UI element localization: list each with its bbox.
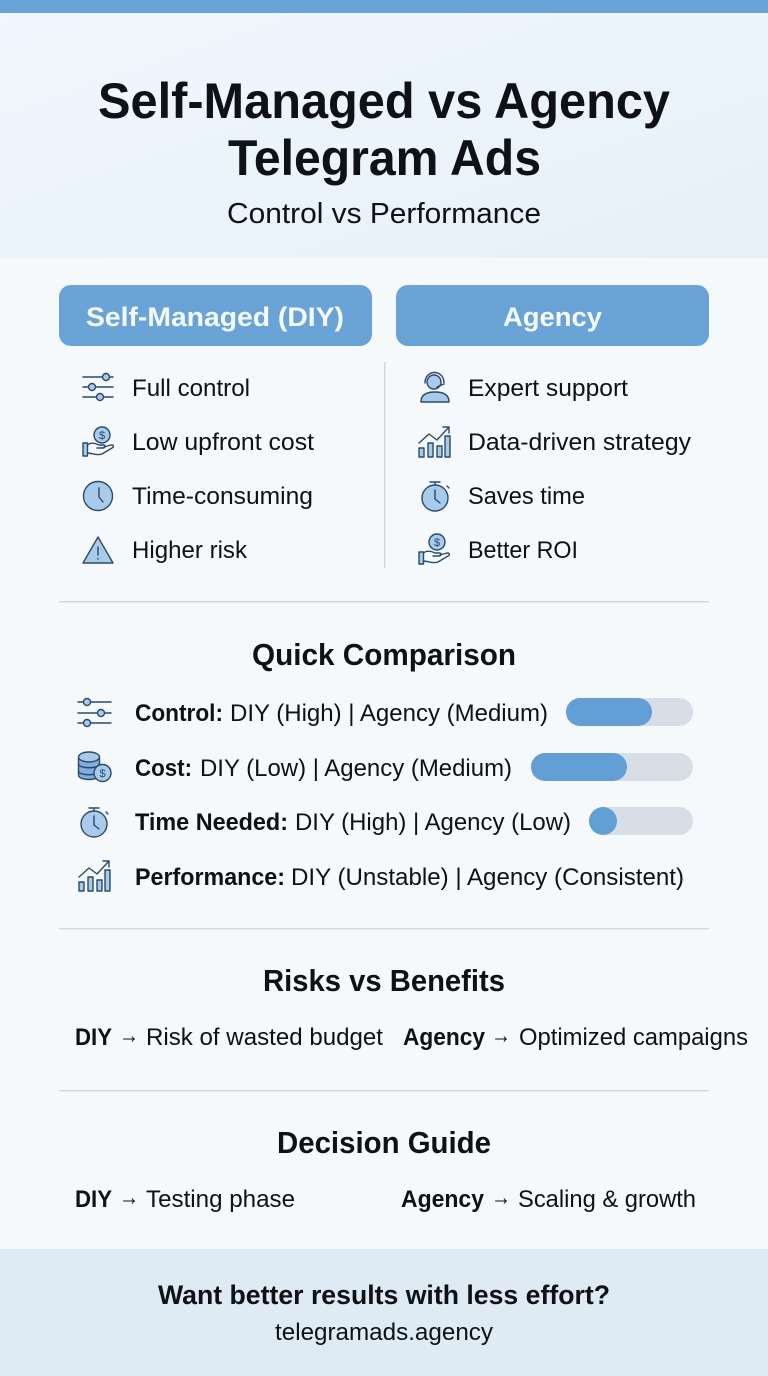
bar: time needed <box>589 807 693 835</box>
row: time needed <box>81 807 693 837</box>
column divider <box>384 362 386 568</box>
row: time needed: Time Needed: <box>135 809 288 836</box>
item: better ROI <box>419 534 578 564</box>
text: agency benefit: Optimized campaigns <box>519 1024 748 1051</box>
item: higher risk <box>83 537 248 564</box>
title: Telegram Ads <box>228 130 541 186</box>
text: DIY risk: DIY <box>75 1024 112 1051</box>
title: Self-Managed vs Agency <box>98 73 670 129</box>
bar: cost <box>531 753 693 781</box>
text: agency guide: Scaling & growth <box>518 1186 696 1213</box>
text: agency guide: → <box>491 1184 511 1211</box>
icon: coins <box>78 752 111 782</box>
text: agency guide: Agency <box>401 1186 485 1213</box>
text: DIY risk: → <box>119 1022 139 1049</box>
row: control <box>78 698 693 727</box>
item: higher risk: Higher risk <box>132 537 248 564</box>
item: better ROI: Better ROI <box>468 537 578 564</box>
heading: quick comparison: Quick Comparison <box>252 637 516 672</box>
row: control: DIY (High) | Agency (Medium) <box>230 700 548 727</box>
heading: agency: Agency <box>503 302 602 332</box>
row: control: Control: <box>135 700 223 727</box>
heading: agency <box>396 285 709 346</box>
row: performance <box>79 861 684 891</box>
item: saves time: Saves time <box>468 483 585 510</box>
text: agency benefit <box>403 1022 748 1051</box>
footer call to action: telegramads.agency <box>275 1319 493 1346</box>
panel: self-managed column <box>59 285 372 564</box>
heading: risks vs benefits: Risks vs Benefits <box>263 963 505 998</box>
item: low upfront cost: $ <box>99 430 105 442</box>
icon: coins: $ <box>99 768 106 780</box>
item: full control: Full control <box>132 375 250 402</box>
text: DIY risk: Risk of wasted budget <box>146 1024 383 1051</box>
row: cost <box>78 752 693 782</box>
item: better ROI: $ <box>434 537 440 549</box>
subtitle: Control vs Performance <box>227 198 541 230</box>
text: DIY guide: → <box>119 1184 139 1211</box>
item: time-consuming: Time-consuming <box>132 483 313 510</box>
footer call to action: Want better results with less effort? <box>158 1280 610 1310</box>
footer call to action <box>0 1249 768 1376</box>
icon: sliders <box>78 698 111 726</box>
item: saves time <box>422 482 585 511</box>
row: performance: Performance: <box>135 864 285 891</box>
text: DIY guide: Testing phase <box>146 1186 295 1213</box>
text: DIY guide <box>75 1184 295 1213</box>
panel: agency column <box>396 285 709 564</box>
item: full control <box>83 374 250 402</box>
row: performance: DIY (Unstable) | Agency (Consistent) <box>291 864 684 891</box>
item: expert support: Expert support <box>468 375 628 402</box>
text: agency benefit: → <box>491 1022 511 1049</box>
row: cost: Cost: <box>135 755 192 782</box>
text: agency benefit: Agency <box>403 1024 486 1051</box>
heading: decision guide: Decision Guide <box>277 1125 491 1160</box>
heading: self-managed: Self-Managed (DIY) <box>86 302 344 332</box>
text: agency guide <box>401 1184 696 1213</box>
row: time needed: DIY (High) | Agency (Low) <box>295 809 571 836</box>
text: DIY guide: DIY <box>75 1186 112 1213</box>
item: data-driven strategy: Data-driven strategy <box>468 429 692 456</box>
header band <box>0 0 768 258</box>
heading: self-managed <box>59 285 372 346</box>
item: low upfront cost: Low upfront cost <box>132 429 314 456</box>
bar: control <box>566 698 693 726</box>
title <box>98 73 670 186</box>
row: cost: DIY (Low) | Agency (Medium) <box>200 755 512 782</box>
